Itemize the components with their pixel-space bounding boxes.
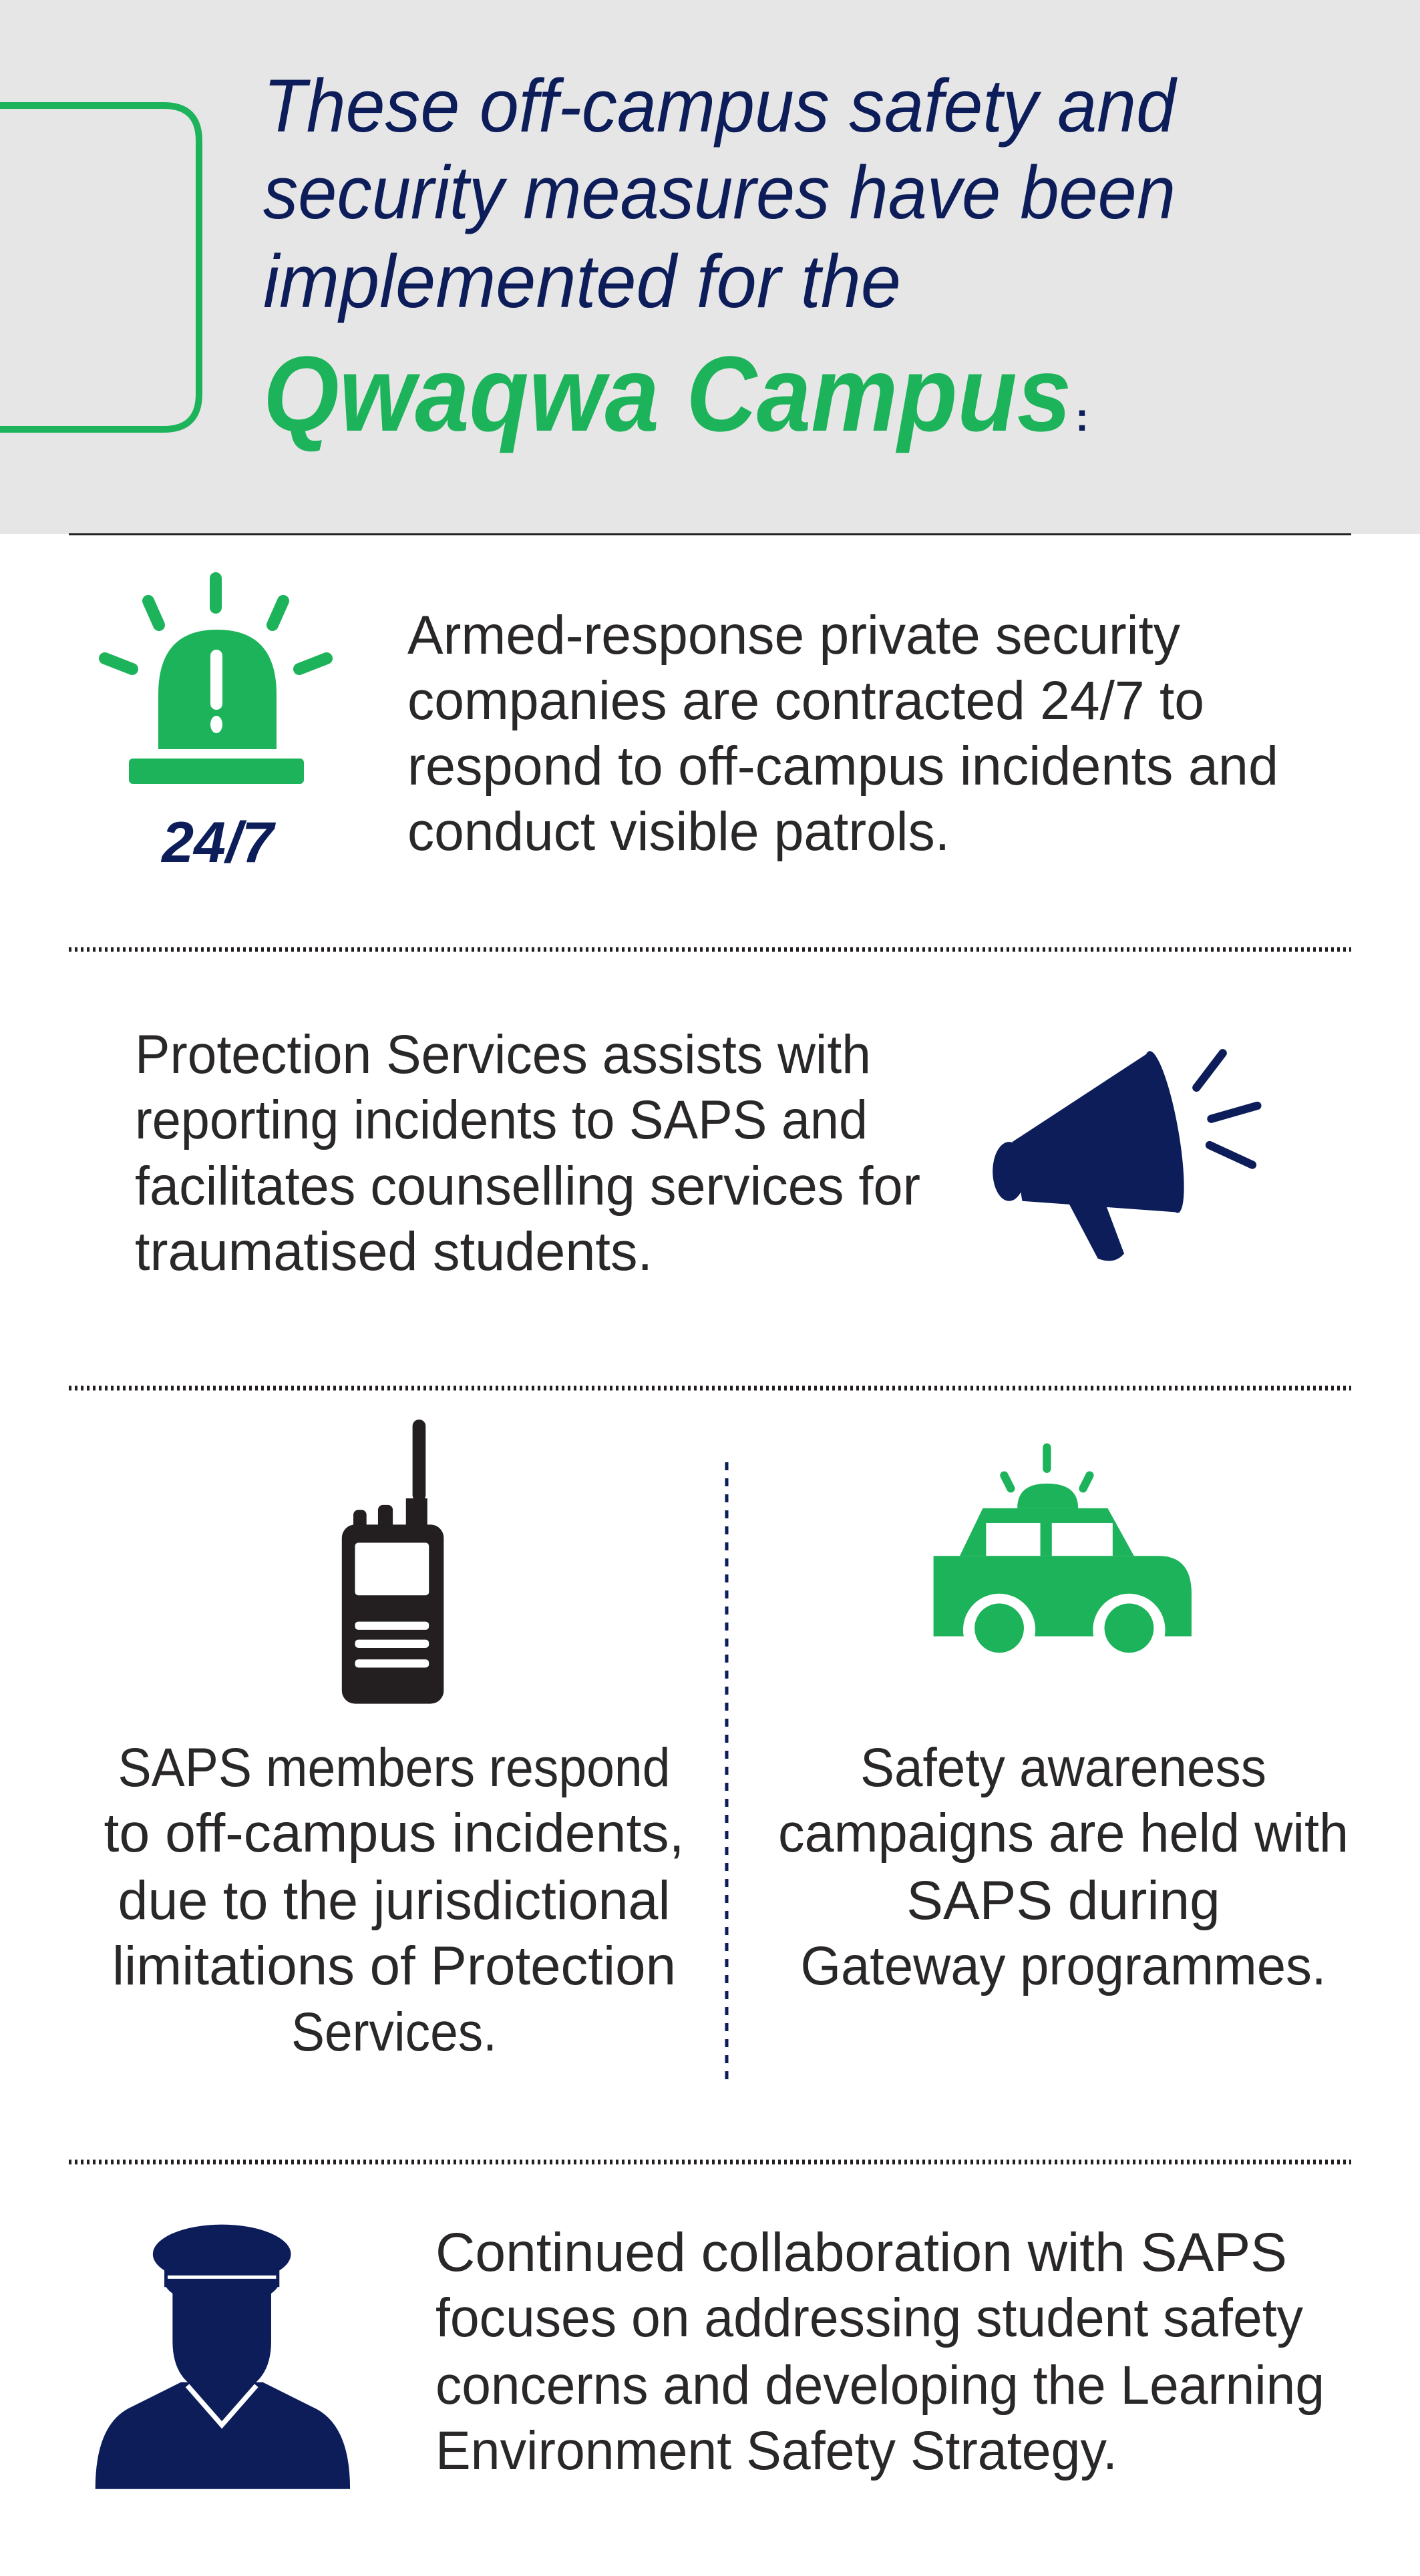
header panel <box>0 0 1420 534</box>
title <box>263 64 1178 453</box>
text block: traumatised students. <box>135 1221 653 1282</box>
text block: Safety awareness <box>860 1737 1266 1798</box>
panel: awareness campaigns <box>778 1448 1349 1996</box>
text block: Armed-response private security <box>407 605 1180 666</box>
text block: Protection Services assists with <box>135 1024 871 1085</box>
icon: radio <box>342 1420 443 1704</box>
icon: police officer <box>96 2225 350 2489</box>
text block: limitations of Protection <box>112 1936 676 1996</box>
text block: facilitates counselling services for <box>135 1156 920 1217</box>
text block: conduct visible patrols. <box>407 801 950 862</box>
panel: armed response <box>105 578 1278 875</box>
text block <box>778 1737 1349 1996</box>
title: security measures have been <box>263 151 1176 234</box>
text block <box>135 1024 920 1282</box>
text block: focuses on addressing student safety <box>435 2288 1303 2348</box>
panel: protection services <box>135 1024 1257 1282</box>
text block: due to the jurisdictional <box>118 1870 671 1931</box>
panel: collaboration <box>96 2222 1324 2489</box>
icon: megaphone <box>993 1048 1257 1261</box>
24/7 label: 24/7 <box>160 811 277 875</box>
title: These off-campus safety and <box>263 64 1178 148</box>
text block: Services. <box>291 2002 497 2063</box>
text block: companies are contracted 24/7 to <box>407 670 1204 731</box>
text block: SAPS members respond <box>118 1737 671 1798</box>
green bracket <box>0 105 199 429</box>
title: : <box>1075 395 1089 439</box>
title: Qwaqwa Campus <box>263 334 1071 453</box>
text block <box>435 2222 1324 2481</box>
text block: respond to off-campus incidents and <box>407 736 1278 797</box>
icon: police car <box>920 1448 1200 1669</box>
text block <box>104 1737 684 2063</box>
text block: Continued collaboration with SAPS <box>435 2222 1287 2283</box>
panel: SAPS respond <box>104 1420 684 2063</box>
text block: SAPS during <box>906 1870 1220 1931</box>
text block: concerns and developing the Learning <box>435 2355 1324 2416</box>
text block <box>407 605 1278 862</box>
text block: Environment Safety Strategy. <box>435 2420 1117 2481</box>
text block: reporting incidents to SAPS and <box>135 1090 868 1150</box>
text block: campaigns are held with <box>778 1803 1349 1864</box>
icon: alarm siren <box>105 578 327 784</box>
text block: Gateway programmes. <box>800 1936 1326 1996</box>
text block: to off-campus incidents, <box>104 1803 684 1864</box>
title: implemented for the <box>263 240 901 323</box>
